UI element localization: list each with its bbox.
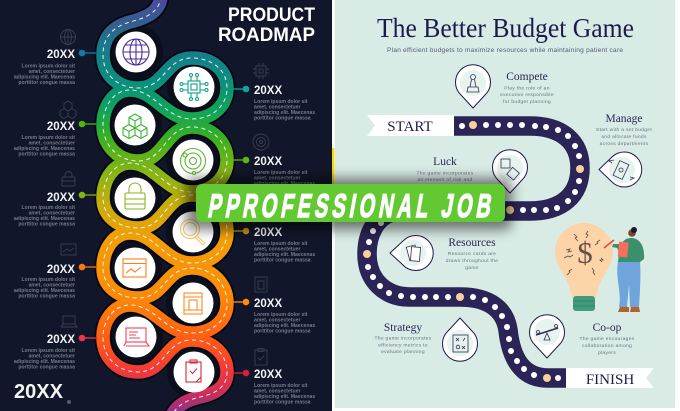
milestone 1: globe: adipiscing elit. Maecenas	[14, 74, 75, 80]
milestone 10: clipboard: 20XX	[254, 369, 282, 381]
strategy text: Strategy	[384, 322, 422, 334]
milestone 7: chart window: adipiscing elit. Maecenas	[14, 288, 75, 294]
strategy pin	[442, 318, 478, 361]
luck text: an element of risk and	[417, 177, 473, 183]
milestone 5: lock: amet, consectetuer	[29, 210, 75, 216]
co-op text: players	[598, 350, 616, 356]
manage pin	[599, 152, 642, 187]
manage text	[596, 113, 652, 147]
milestone 9: laptop: adipiscing elit. Maecenas	[14, 359, 75, 365]
milestone 6: magnifier: Lorem ipsum dolor sit	[254, 241, 308, 247]
roadmap title	[218, 5, 315, 46]
milestone 9: laptop	[14, 316, 156, 370]
milestone 4: orbit: porttitor congue massa	[254, 186, 311, 192]
manage text: Start with a set budget	[596, 127, 652, 133]
resources text: drawn throughout the	[446, 258, 498, 264]
milestone 4: orbit	[172, 134, 315, 192]
milestone 6: magnifier: 20XX	[254, 227, 282, 239]
co-op text	[579, 322, 635, 356]
milestone 10: clipboard: Lorem ipsum dolor sit	[254, 383, 308, 389]
milestone 8: tablet: adipiscing elit. Maecenas	[254, 323, 315, 329]
milestone 9: laptop: porttitor congue massa	[18, 364, 75, 370]
milestone 4: orbit: amet, consectetuer	[254, 176, 300, 182]
milestone 7: chart window: 20XX	[47, 264, 75, 276]
compete text: Compete	[506, 71, 548, 83]
compete text: Play the role of an	[504, 86, 550, 92]
banner: pprofessional job: PPROFESSIONAL JOB	[206, 187, 499, 224]
milestone 3: cubes: Lorem ipsum dolor sit	[22, 135, 75, 141]
milestone 3: cubes: 20XX	[47, 121, 75, 133]
milestone 10: clipboard	[174, 348, 315, 406]
light bulb illustration: $	[577, 235, 593, 270]
milestone 10: clipboard: amet, consectetuer	[254, 388, 300, 394]
resources text: Resources	[448, 237, 496, 249]
milestone 5: lock: adipiscing elit. Maecenas	[14, 216, 75, 222]
panel: product roadmap background	[0, 0, 332, 411]
strategy text	[374, 322, 432, 355]
strategy text: evaluate planning	[381, 349, 425, 355]
person illustration	[604, 227, 644, 312]
milestone 5: lock	[14, 172, 156, 228]
roadmap title: PRODUCT	[228, 5, 315, 26]
milestone 9: laptop: Lorem ipsum dolor sit	[22, 348, 75, 354]
milestone 1: globe: amet, consectetuer	[29, 69, 75, 75]
compete text: executive responsible	[500, 92, 554, 98]
milestone 7: chart window: amet, consectetuer	[29, 282, 75, 288]
dark rings behind milestones	[108, 25, 221, 399]
milestone 4: orbit: 20XX	[254, 156, 282, 168]
milestone 9: laptop: amet, consectetuer	[29, 354, 75, 360]
resources text: Resource cards are	[448, 251, 496, 257]
milestone 8: tablet: porttitor congue massa	[254, 328, 311, 334]
milestone 8: tablet: 20XX	[254, 298, 282, 310]
footer year: 20XX	[14, 381, 64, 403]
milestone 7: chart window	[14, 244, 156, 300]
milestone 3: cubes	[14, 101, 156, 158]
board game path	[363, 121, 584, 382]
panel: budget game background	[335, 0, 675, 408]
roadmap title: ROADMAP	[218, 25, 315, 46]
milestone 8: tablet: Lorem ipsum dolor sit	[254, 312, 308, 318]
roadmap winding road	[103, 0, 227, 411]
milestone 6: magnifier: amet, consectetuer	[254, 246, 300, 252]
milestone 5: lock: 20XX	[47, 192, 75, 204]
milestone 1: globe: Lorem ipsum dolor sit	[22, 64, 75, 70]
compete pin	[456, 65, 490, 108]
compete text: for budget planning	[503, 99, 551, 105]
milestone 1: globe: porttitor congue massa	[18, 80, 75, 86]
milestone 3: cubes: amet, consectetuer	[29, 140, 75, 146]
resources text: game	[465, 266, 479, 271]
milestone 8: tablet	[172, 277, 315, 334]
milestone 6: magnifier: porttitor congue massa	[254, 258, 311, 264]
milestone 2: chip	[174, 63, 315, 122]
milestone 2: chip: Lorem ipsum dolor sit	[254, 99, 308, 105]
milestone 2: chip: adipiscing elit. Maecenas	[254, 110, 315, 116]
budget game title: The Better Budget Game	[377, 13, 634, 43]
milestone 3: cubes: porttitor congue massa	[18, 152, 75, 158]
co-op text: Co-op	[593, 322, 622, 334]
milestone 8: tablet: amet, consectetuer	[254, 318, 300, 324]
milestone 2: chip: amet, consectetuer	[254, 104, 300, 110]
milestone 2: chip: 20XX	[254, 85, 282, 97]
milestone 9: laptop: 20XX	[47, 334, 75, 346]
banner shadow	[186, 178, 512, 230]
manage text: and allocate funds	[601, 134, 647, 140]
milestone 4: orbit: adipiscing elit. Maecenas	[254, 181, 315, 187]
milestone 2: chip: porttitor congue massa	[254, 116, 311, 122]
milestone 10: clipboard: porttitor congue massa	[254, 400, 311, 406]
strategy text: efficiency metrics to	[378, 342, 428, 348]
yellow edge strip	[332, 148, 334, 188]
luck text	[416, 156, 474, 183]
resources pin	[390, 236, 433, 270]
milestone 10: clipboard: adipiscing elit. Maecenas	[254, 394, 315, 400]
milestone 7: chart window: porttitor congue massa	[18, 294, 75, 300]
co-op pin	[530, 315, 565, 358]
milestone 3: cubes: adipiscing elit. Maecenas	[14, 146, 75, 152]
milestone 5: lock: porttitor congue massa	[18, 222, 75, 228]
co-op text: The game encourages	[579, 336, 635, 342]
start ribbon	[367, 115, 454, 136]
milestone 1: globe: 20XX	[47, 49, 75, 61]
milestone 7: chart window: Lorem ipsum dolor sit	[22, 277, 75, 283]
manage text: across departments	[600, 141, 649, 147]
finish ribbon: FINISH	[586, 372, 634, 388]
luck text: The game incorporates	[416, 170, 474, 176]
budget game subtitle: Plan efficient budgets to maximize resources while maintaining patient care	[387, 47, 623, 54]
resources text	[446, 237, 498, 271]
milestone 4: orbit: Lorem ipsum dolor sit	[254, 170, 308, 176]
start ribbon: START	[387, 119, 433, 135]
compete text	[500, 71, 554, 105]
luck pin	[492, 150, 528, 193]
manage text: Manage	[605, 113, 643, 125]
milestone 1: globe	[14, 30, 156, 86]
milestone 5: lock: Lorem ipsum dolor sit	[22, 205, 75, 211]
co-op text: collaboration among	[582, 343, 632, 349]
strategy text: The game incorporates	[374, 336, 432, 342]
luck text: Luck	[433, 156, 457, 168]
light bulb illustration	[555, 223, 613, 311]
milestone 6: magnifier: adipiscing elit. Maecenas	[254, 252, 315, 258]
finish ribbon	[566, 368, 654, 388]
milestone 6: magnifier	[172, 212, 315, 264]
